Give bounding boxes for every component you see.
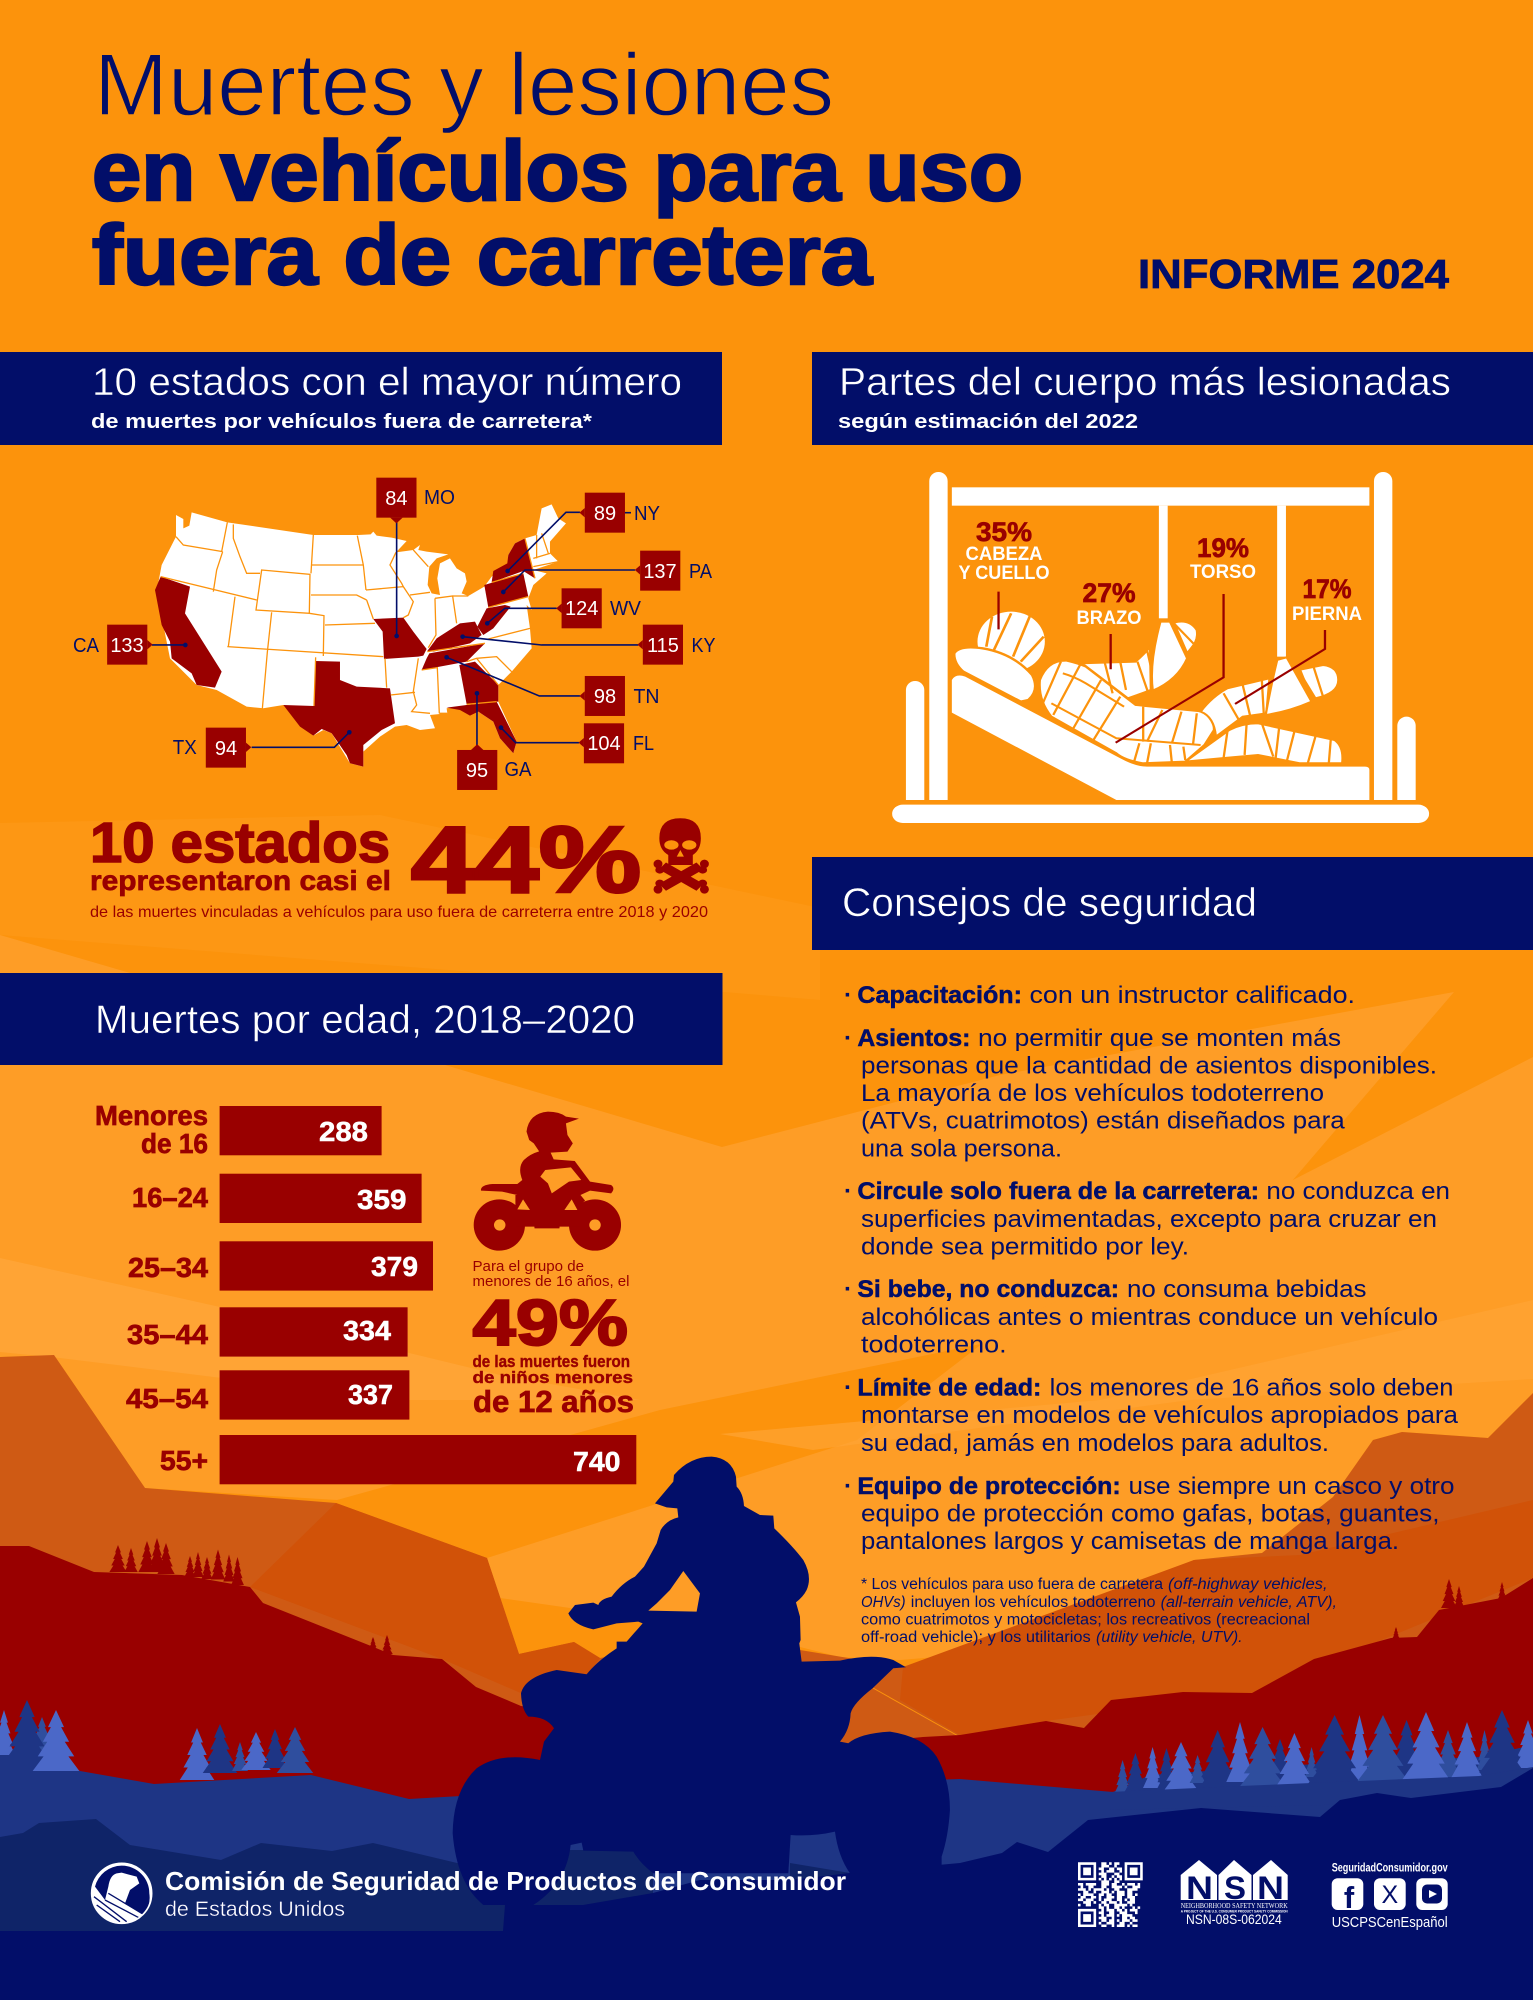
age labels: 55+ <box>160 1445 208 1476</box>
callout leader lines <box>152 512 638 750</box>
tip: off-road only: no conduzca en <box>1266 1178 1450 1205</box>
panel heading: deaths by age <box>0 973 722 1065</box>
footnote: OHVs) <box>861 1594 906 1611</box>
tip: no drinking: alcohólicas antes o mientras conduce un vehículo <box>861 1304 1438 1331</box>
bar values: 334 <box>343 1315 391 1346</box>
safety tips list <box>844 982 1458 1646</box>
tip: protective gear: pantalones largos y camisetas de manga larga. <box>861 1528 1399 1555</box>
bar chart: deaths by age <box>95 1100 636 1484</box>
callout: 49% under 12: Para el grupo de <box>472 1258 584 1275</box>
age labels: 16–24 <box>132 1182 208 1213</box>
report year: INFORME 2024 <box>1138 251 1449 297</box>
bar values: 740 <box>573 1446 620 1477</box>
tip: protective gear: · <box>844 1473 852 1500</box>
footnote: incluyen los vehículos todoterreno <box>911 1594 1156 1611</box>
footnote: (all-terrain vehicle, ATV), <box>1161 1594 1337 1611</box>
logo: Neighborhood Safety Network: NEIGHBORHOOD SAFETY NETWORK <box>1181 1901 1288 1910</box>
panel heading: top 10 states <box>0 352 722 445</box>
callout: 10 states 44%: de las muertes vinculadas a vehículos para uso fuera de carreterra entre 2018 y 2020 <box>90 904 708 921</box>
panel heading: top 10 states: de muertes por vehículos fuera de carretera* <box>91 411 592 433</box>
label: torso 19% <box>1190 533 1256 583</box>
tip: seats: una sola persona. <box>861 1136 1062 1163</box>
label: leg 17%: PIERNA <box>1292 604 1362 625</box>
tip: training <box>844 982 1355 1009</box>
label: head and neck 35%: 35% <box>976 517 1032 547</box>
tip: protective gear: equipo de protección como gafas, botas, guantes, <box>861 1500 1440 1527</box>
map shapes <box>155 504 566 767</box>
callout: 10 states 44%: 44% <box>411 807 641 912</box>
footnote: (utility vehicle, UTV). <box>1096 1629 1243 1646</box>
chart: US map of top 10 states: GA <box>504 759 532 781</box>
icon: youtube <box>1416 1878 1448 1910</box>
icon: child on ATV <box>474 1112 621 1251</box>
callout: 49% under 12: de niños menores <box>472 1368 633 1387</box>
tip: seats: La mayoría de los vehículos todoterreno <box>861 1080 1324 1107</box>
chart: US map of top 10 states: 89 <box>594 503 616 525</box>
tip: no drinking: no consuma bebidas <box>1127 1276 1366 1303</box>
logo: Neighborhood Safety Network: A PROJECT OF THE U.S. CONSUMER PRODUCT SAFETY COMMISSION <box>1181 1910 1288 1914</box>
logo: Neighborhood Safety Network: N <box>1257 1870 1284 1906</box>
tip: off-road only <box>844 1178 1450 1260</box>
chart: US map of top 10 states: TN <box>634 686 660 708</box>
age labels: 35–44 <box>127 1319 208 1350</box>
chart: US map of top 10 states: CA <box>73 635 100 657</box>
logo: CPSC seal <box>92 1863 152 1923</box>
label: head and neck 35%: Y CUELLO <box>958 563 1050 584</box>
footnote: * Los vehículos para uso fuera de carretera <box>861 1576 1163 1593</box>
logo: Neighborhood Safety Network: NSN-08S-062024 <box>1186 1911 1282 1927</box>
chart: US map of top 10 states: 115 <box>647 635 679 657</box>
logo: Neighborhood Safety Network: S <box>1224 1870 1246 1906</box>
age labels: Menores <box>95 1100 208 1131</box>
tip: protective gear: use siempre un casco y otro <box>1128 1473 1454 1500</box>
tip: no drinking: Si bebe, no conduzca: <box>857 1276 1119 1303</box>
panel heading: safety tips <box>812 857 1533 950</box>
tip: no drinking: todoterreno. <box>861 1332 1007 1359</box>
silhouette: rider on ATV <box>453 1457 950 1905</box>
panel heading: injured body parts: Partes del cuerpo más lesionadas <box>839 361 1451 404</box>
website and social media: SeguridadConsumidor.gov <box>1332 1863 1448 1875</box>
website and social media <box>1332 1863 1448 1931</box>
chart: US map of top 10 states: 137 <box>643 561 677 583</box>
chart: US map of top 10 states: 98 <box>594 686 616 708</box>
logo: Neighborhood Safety Network: N <box>1186 1870 1213 1906</box>
tip: seats <box>844 1025 1437 1163</box>
icon: X: X <box>1381 1881 1398 1909</box>
callout: 49% under 12: 49% <box>472 1286 628 1359</box>
illustration: patient in hospital bed <box>892 472 1429 823</box>
chart: US map of top 10 states: KY <box>692 635 716 657</box>
bar values: 337 <box>348 1379 393 1410</box>
tip: seats: no permitir que se monten más <box>978 1025 1341 1052</box>
panel heading: injured body parts: según estimación del 2022 <box>838 411 1138 433</box>
callout: 10 states 44%: 10 estados <box>90 811 390 875</box>
tip: training: · <box>844 982 852 1009</box>
callout: 49% under 12: menores de 16 años, el <box>472 1273 630 1290</box>
tip: age limit: su edad, jamás en modelos para adultos. <box>861 1430 1329 1457</box>
tip: age limit: montarse en modelos de vehículos apropiados para <box>861 1402 1458 1429</box>
tip: no drinking <box>844 1276 1438 1359</box>
chart: US map of top 10 states: TX <box>173 737 197 759</box>
footnote <box>861 1576 1337 1646</box>
tip: off-road only: · <box>844 1178 852 1205</box>
tip: protective gear: Equipo de protección: <box>857 1473 1121 1500</box>
title <box>92 35 1023 302</box>
bar values: 379 <box>371 1251 418 1282</box>
label: leg 17% <box>1292 574 1362 625</box>
logo: Neighborhood Safety Network <box>1181 1860 1288 1927</box>
tip: off-road only: donde sea permitido por ley. <box>861 1234 1189 1260</box>
tip: off-road only: Circule solo fuera de la carretera: <box>857 1178 1259 1205</box>
label: leg 17%: 17% <box>1302 574 1352 604</box>
tip: seats: personas que la cantidad de asientos disponibles. <box>861 1053 1437 1080</box>
footnote: off-road vehicle); y los utilitarios <box>861 1629 1091 1646</box>
chart: US map of top 10 states: PA <box>689 561 713 583</box>
title: en vehículos para uso <box>92 124 1023 218</box>
chart: US map of top 10 states: WV <box>610 598 642 620</box>
chart: US map of top 10 states: 95 <box>466 760 488 782</box>
title: Muertes y lesiones <box>94 35 834 134</box>
title: fuera de carretera <box>92 208 873 302</box>
callout: 10 states 44% <box>90 807 709 921</box>
tip: seats: · <box>844 1025 852 1052</box>
bar values: 288 <box>319 1116 368 1147</box>
label: torso 19%: 19% <box>1197 533 1249 563</box>
bar values <box>319 1116 620 1477</box>
age labels <box>95 1100 208 1476</box>
callout: 49% under 12 <box>472 1258 634 1419</box>
tip: age limit <box>844 1374 1458 1457</box>
chart: US map of top 10 states: 104 <box>587 733 621 755</box>
label: head and neck 35% <box>958 517 1050 584</box>
label: torso 19%: TORSO <box>1190 562 1256 583</box>
agency name <box>165 1866 846 1921</box>
bar values: 359 <box>357 1184 406 1215</box>
callout: 10 states 44%: representaron casi el <box>90 865 391 896</box>
tip: protective gear <box>844 1473 1454 1555</box>
callout: 49% under 12: de las muertes fueron <box>472 1352 630 1371</box>
tip: training: con un instructor calificado. <box>1030 982 1355 1009</box>
chart: US map of top 10 states: 94 <box>215 738 237 760</box>
chart: US map of top 10 states: NY <box>634 503 660 525</box>
label: arm 27% <box>1076 578 1142 629</box>
website and social media: USCPSCenEspañol <box>1332 1914 1448 1931</box>
chart: US map of top 10 states: FL <box>633 733 654 755</box>
tip: no drinking: · <box>844 1276 852 1303</box>
agency name: Comisión de Seguridad de Productos del Consumidor <box>165 1866 846 1896</box>
chart: US map of top 10 states: 124 <box>565 598 598 620</box>
chart: US map of top 10 states <box>73 478 716 790</box>
age labels: de 16 <box>141 1128 208 1159</box>
tip: age limit: los menores de 16 años solo deben <box>1050 1374 1454 1402</box>
age labels: 25–34 <box>128 1252 208 1283</box>
chart: US map of top 10 states: 84 <box>385 488 408 510</box>
tip: off-road only: superficies pavimentadas, excepto para cruzar en <box>861 1206 1437 1233</box>
panel heading: injured body parts <box>812 352 1533 445</box>
chart: US map of top 10 states: MO <box>424 487 455 509</box>
footnote: como cuatrimotos y motocicletas; los recreativos (recreacional <box>861 1612 1310 1628</box>
agency name: de Estados Unidos <box>165 1898 345 1921</box>
panel heading: deaths by age: Muertes por edad, 2018–2020 <box>95 998 635 1042</box>
label: head and neck 35%: CABEZA <box>966 544 1043 565</box>
label: arm 27%: 27% <box>1082 578 1136 608</box>
callout: 49% under 12: de 12 años <box>473 1384 634 1419</box>
icon: skull and crossbones <box>654 818 709 894</box>
tip: training: Capacitación: <box>857 982 1022 1009</box>
label: arm 27%: BRAZO <box>1076 608 1142 629</box>
tip: seats: Asientos: <box>857 1025 970 1052</box>
chart: US map of top 10 states: 133 <box>110 635 144 657</box>
tip: age limit: · <box>844 1374 852 1402</box>
bars <box>220 1106 636 1484</box>
callout boxes <box>107 478 683 790</box>
tip: age limit: Límite de edad: <box>857 1374 1041 1402</box>
icon: facebook: f <box>1344 1880 1355 1915</box>
tip: seats: (ATVs, cuatrimotos) están diseñados para <box>861 1108 1345 1135</box>
age labels: 45–54 <box>126 1383 208 1414</box>
QR code <box>1078 1864 1143 1926</box>
footnote: (off-highway vehicles, <box>1168 1576 1328 1593</box>
panel heading: top 10 states: 10 estados con el mayor número <box>92 361 682 404</box>
panel heading: safety tips: Consejos de seguridad <box>842 881 1257 925</box>
